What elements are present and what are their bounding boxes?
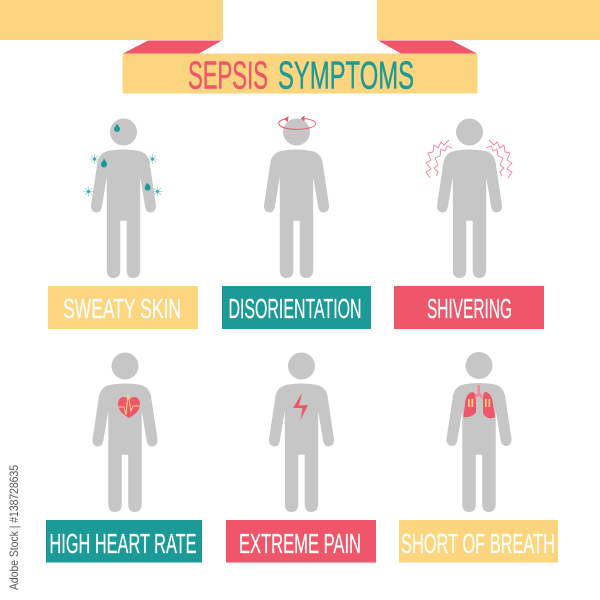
icon: lightning bolt xyxy=(293,393,308,420)
label: extreme pain: EXTREME PAIN xyxy=(239,528,361,559)
figure: shivering xyxy=(437,118,502,278)
label: disorientation xyxy=(222,286,371,329)
label: disorientation: DISORIENTATION xyxy=(228,293,362,324)
label: extreme pain xyxy=(226,520,376,562)
label: sweaty skin: SWEATY SKIN xyxy=(63,293,181,324)
figure: sweaty skin xyxy=(91,118,156,278)
label: short of breath xyxy=(399,520,558,562)
figure: disorientation xyxy=(264,118,329,278)
icon: lungs xyxy=(464,385,495,418)
banner: top ribbon xyxy=(0,0,600,94)
label: shivering: SHIVERING xyxy=(427,293,512,324)
icon: shiver lines xyxy=(426,140,512,178)
icon: dizzy ring xyxy=(279,116,316,129)
label: high heart rate: HIGH HEART RATE xyxy=(50,528,196,559)
label: sweaty skin xyxy=(48,286,198,329)
title: SEPSIS xyxy=(188,54,268,98)
figure: extreme pain xyxy=(269,352,334,512)
label: high heart rate xyxy=(46,520,202,562)
title xyxy=(188,54,414,98)
title: SYMPTOMS xyxy=(278,54,414,98)
icon: chill snowflakes xyxy=(84,154,162,196)
stock id caption: Adobe Stock | #138728635 xyxy=(7,465,21,590)
label: shivering xyxy=(394,286,544,329)
figure: high heart rate xyxy=(93,352,157,512)
figure: short of breath xyxy=(447,352,511,512)
icon: heart with pulse xyxy=(118,394,140,418)
icon: sweat drops xyxy=(101,124,151,191)
